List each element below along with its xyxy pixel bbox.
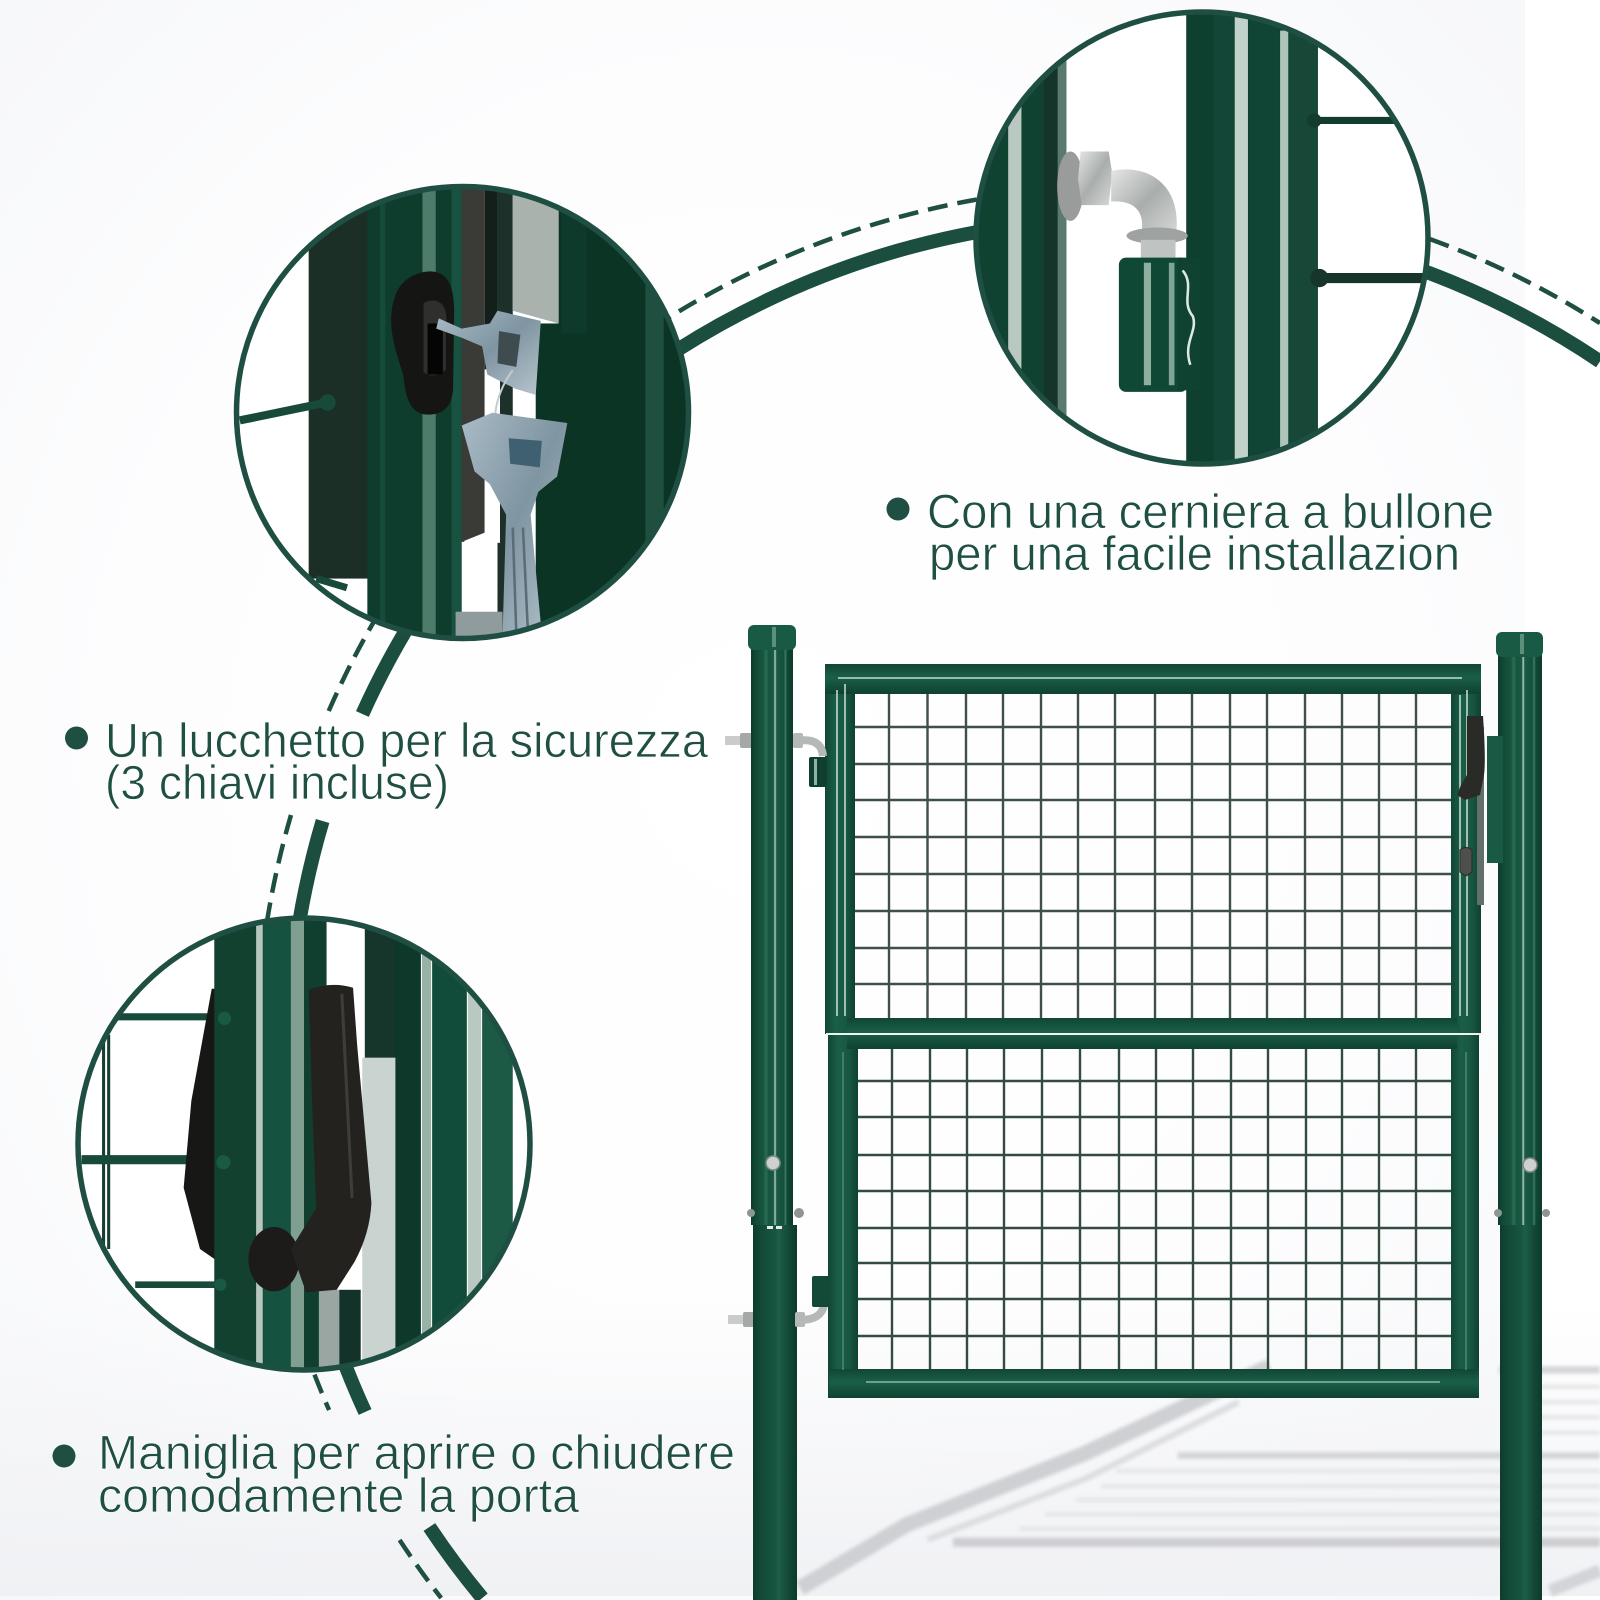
icon: keys — [436, 311, 567, 635]
text: handle caption — [52, 1427, 735, 1523]
bolts on left post — [725, 733, 754, 1327]
panel: lock detail circle — [236, 181, 694, 650]
text: handle caption: Maniglia per aprire o chiudere — [98, 1427, 735, 1480]
icon: rubber keyhole — [391, 271, 454, 415]
wire mesh upper panel — [853, 692, 1452, 1018]
gate frame — [825, 664, 1481, 1398]
text: hinge caption: per una facile installazion — [929, 528, 1460, 581]
icon: black handle — [248, 985, 371, 1292]
text: handle caption: comodamente la porta — [98, 1470, 579, 1523]
panel: handle detail circle — [78, 917, 530, 1371]
icon: bolt hinge — [1057, 152, 1201, 392]
upper left hinge — [793, 733, 827, 787]
text: lock caption: Un lucchetto per la sicurezza — [105, 715, 708, 768]
panel: hinge detail circle — [974, 0, 1430, 469]
text: lock caption — [65, 715, 708, 810]
connector arc: dashed line — [256, 186, 1600, 1598]
lower left hinge — [795, 1276, 829, 1327]
right gate post — [1494, 632, 1550, 1600]
connector arc: thick line — [288, 218, 1600, 1598]
left gate post — [725, 625, 804, 1600]
wire mesh lower panel — [856, 1049, 1452, 1369]
floor shadow of the gate — [800, 1366, 1600, 1591]
text: hinge caption: Con una cerniera a bullone — [927, 486, 1494, 539]
text: lock caption: (3 chiavi incluse) — [105, 757, 449, 810]
latch and lock — [1457, 716, 1503, 905]
text: hinge caption — [886, 486, 1494, 581]
